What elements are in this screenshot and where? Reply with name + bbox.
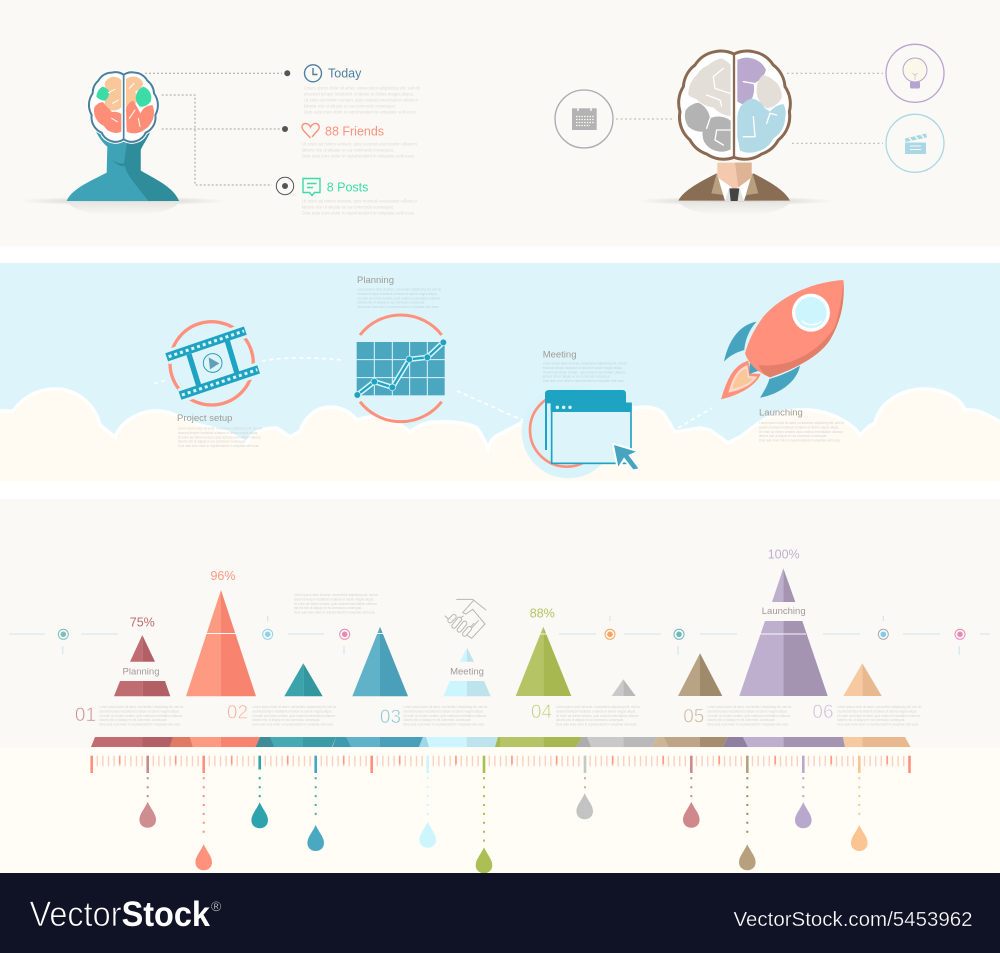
text: step 06 description: Duis aute irure dolor in reprehenderit in voluptate velit esse (837, 723, 918, 727)
connector dots (276, 70, 294, 195)
text: posts description: Duis aute irure dolor in reprehenderit in voluptate velit esse (302, 210, 414, 216)
text: step 06 description: laboris nisi ut aliquip ex ea commodo consequat. (837, 718, 905, 722)
pyramid: grey (612, 679, 636, 696)
step numbers: 03 (380, 707, 401, 728)
pyramid: Planning 75% (114, 635, 170, 696)
pyramid: Launching 100% (739, 568, 828, 696)
text: project setup description: Duis aute irure dolor in reprehenderit in voluptate velit esse (178, 444, 259, 448)
panel: timeline (0, 499, 1000, 873)
text: step 02 description: eiusmod tempor incididunt ut labore et dolore magna aliqua. (252, 709, 332, 713)
text: step 03 description: eiusmod tempor incididunt ut labore et dolore magna aliqua. (403, 709, 483, 713)
text: step 04 description: laboris nisi ut aliquip ex ea commodo consequat. (556, 718, 624, 722)
text: step 02 description: laboris nisi ut aliquip ex ea commodo consequat. (252, 718, 320, 722)
label: Launching: Launching (762, 606, 806, 617)
text: meeting description: Lorem ipsum dolor sit amet, consectetur adipisicing elit, sed do (543, 362, 627, 366)
text: friends description: laboris nisi ut aliquip ex ea commodo consequat. (302, 148, 394, 154)
text: friends description: Duis aute irure dolor in reprehenderit in voluptate velit esse (302, 154, 414, 160)
text: step 05 description: eiusmod tempor incididunt ut labore et dolore magna aliqua. (707, 709, 787, 713)
text: launching description: Ut enim ad minim veniam, quis nostrud exercitation ullamco (759, 430, 843, 434)
label: Launching: Launching (759, 408, 803, 418)
pyramid: tan (678, 653, 722, 696)
text: step 04 description (556, 705, 640, 727)
heading: Today: Today (328, 66, 362, 80)
text: posts description: Ut enim ad minim veniam, quis nostrud exercitation ullamco (302, 198, 417, 204)
text: step 01 description (99, 705, 183, 727)
text: step 04 description: Lorem ipsum dolor sit amet, consectetur adipisicing elit, sed do (556, 705, 640, 709)
text: step 05 description (707, 705, 791, 727)
label: Planning: Planning (123, 666, 159, 678)
icon: clapperboard (886, 114, 944, 172)
icon: growth chart (354, 315, 447, 422)
text: planning description: Lorem ipsum dolor sit amet, consectetur adipisicing elit, sed do (357, 288, 441, 292)
label: Meeting: Meeting (450, 666, 484, 678)
icon: chat bubble (303, 178, 320, 196)
text: today description: laboris nisi ut aliquip ex ea commodo consequat. (304, 104, 396, 110)
icon: clock (304, 65, 322, 82)
left head figure with brain (67, 72, 179, 201)
text: step 01 description: Duis aute irure dolor in reprehenderit in voluptate velit esse (99, 723, 180, 727)
icon: light bulb (886, 44, 944, 102)
text: step 06 description: eiusmod tempor incididunt ut labore et dolore magna aliqua. (837, 709, 917, 713)
text: top description: Lorem ipsum dolor sit amet, consectetur adipisicing elit, sed do (294, 593, 378, 597)
icon: handshake (445, 599, 486, 638)
text: step 04 description: Duis aute irure dolor in reprehenderit in voluptate velit esse (556, 723, 637, 727)
step numbers (75, 702, 834, 728)
text: today description: eiusmod tempor incididunt ut labore et dolore magna aliqua. (304, 92, 414, 98)
text: step 01 description: eiusmod tempor incididunt ut labore et dolore magna aliqua. (99, 709, 179, 713)
text: step 03 description: Ut enim ad minim veniam, quis nostrud exercitation ullamco (403, 714, 486, 718)
text: friends description: Ut enim ad minim veniam, quis nostrud exercitation ullamco (302, 142, 417, 148)
text: top description: Ut enim ad minim veniam, quis nostrud exercitation ullamco (294, 602, 377, 606)
text: posts description (302, 198, 417, 216)
text: today description (304, 86, 420, 116)
step numbers: 04 (531, 702, 552, 723)
ruler (91, 756, 910, 773)
step numbers: 05 (683, 707, 704, 728)
text: friends description (302, 142, 417, 160)
text: step 06 description: Ut enim ad minim veniam, quis nostrud exercitation ullamco (837, 714, 920, 718)
text: launching description: eiusmod tempor incididunt ut labore et dolore magna aliqua. (759, 425, 839, 429)
text: top description: eiusmod tempor incididunt ut labore et dolore magna aliqua. (294, 597, 374, 601)
value: 96%: 96% (210, 569, 236, 583)
image id: VectorStock.com/5453962 (734, 909, 972, 931)
value: 88%: 88% (530, 607, 555, 621)
text: launching description (759, 421, 844, 443)
text: launching description: Duis aute irure dolor in reprehenderit in voluptate velit esse (759, 439, 840, 443)
logo: VectorStock: VectorStock (30, 895, 210, 934)
text: planning description: eiusmod tempor incididunt ut labore et dolore magna aliqua. (357, 292, 437, 296)
timeline nodes (58, 629, 965, 639)
text: project setup description: eiusmod tempor incididunt ut labore et dolore magna aliqua. (178, 431, 258, 435)
value: 75%: 75% (130, 616, 155, 630)
text: meeting description: laboris nisi ut aliquip ex ea commodo consequat. (543, 375, 611, 379)
value: 100%: 100% (768, 548, 800, 562)
text: top description: laboris nisi ut aliquip ex ea commodo consequat. (294, 606, 362, 610)
text: launching description: laboris nisi ut aliquip ex ea commodo consequat. (759, 434, 827, 438)
text: step 06 description (837, 705, 921, 727)
text: step 05 description: Duis aute irure dolor in reprehenderit in voluptate velit esse (707, 723, 788, 727)
text: step 05 description: laboris nisi ut aliquip ex ea commodo consequat. (707, 718, 775, 722)
timeline dashes (9, 616, 990, 655)
text: planning description: laboris nisi ut aliquip ex ea commodo consequat. (357, 301, 425, 305)
text: today description: Duis aute irure dolor in reprehenderit in voluptate velit esse (304, 110, 416, 116)
businessman figure with brain (678, 51, 790, 201)
dashed flight path (154, 358, 712, 428)
panel: sky with clouds (0, 263, 1000, 499)
text: step 01 description: Ut enim ad minim veniam, quis nostrud exercitation ullamco (99, 714, 182, 718)
left head shadow (18, 196, 228, 216)
text: step 02 description: Duis aute irure dolor in reprehenderit in voluptate velit esse (252, 723, 333, 727)
text: launching description: Lorem ipsum dolor sit amet, consectetur adipisicing elit, sed do (759, 421, 844, 425)
icon: film reel (167, 322, 259, 405)
text: step 02 description: Lorem ipsum dolor sit amet, consectetur adipisicing elit, sed do (252, 705, 336, 709)
text: planning description: Duis aute irure dolor in reprehenderit in voluptate velit esse (357, 305, 438, 309)
text: today description: Lorem ipsum dolor sit amet, consectetur adipisicing elit, sed do (304, 86, 420, 92)
text: step 05 description: Ut enim ad minim veniam, quis nostrud exercitation ullamco (707, 714, 790, 718)
text: step 03 description: Duis aute irure dolor in reprehenderit in voluptate velit esse (403, 723, 484, 727)
label: Meeting: Meeting (543, 350, 577, 360)
heading: 88 Friends: 88 Friends (325, 125, 384, 139)
text: project setup description (178, 426, 262, 448)
pyramid: teal small (284, 663, 323, 696)
colour ribbon (91, 737, 910, 747)
text: step 06 description: Lorem ipsum dolor sit amet, consectetur adipisicing elit, sed do (837, 705, 921, 709)
text: step 03 description (403, 705, 487, 727)
text: step 03 description: laboris nisi ut aliquip ex ea commodo consequat. (403, 718, 471, 722)
text: step 04 description: Ut enim ad minim veniam, quis nostrud exercitation ullamco (556, 714, 639, 718)
step numbers: 01 (75, 705, 96, 726)
label: Planning: Planning (357, 275, 394, 286)
text: meeting description: Duis aute irure dolor in reprehenderit in voluptate velit esse (543, 379, 624, 383)
icon: heart (302, 123, 319, 138)
text: posts description: laboris nisi ut aliquip ex ea commodo consequat. (302, 204, 394, 210)
connector lines left (145, 73, 282, 185)
text: step 05 description: Lorem ipsum dolor sit amet, consectetur adipisicing elit, sed do (707, 705, 791, 709)
text: project setup description: Ut enim ad minim veniam, quis nostrud exercitation ullamco (178, 435, 261, 439)
text: project setup description: Lorem ipsum dolor sit amet, consectetur adipisicing elit, sed do (178, 426, 262, 430)
text: project setup description: laboris nisi ut aliquip ex ea commodo consequat. (178, 440, 246, 444)
clouds (0, 389, 1000, 483)
panel: brain profiles (0, 0, 1000, 246)
dotted droplines (148, 777, 859, 845)
step numbers: 06 (812, 702, 834, 723)
icon: rocket (721, 280, 844, 399)
step numbers: 02 (227, 703, 248, 724)
heading: 8 Posts: 8 Posts (327, 181, 368, 195)
pyramid: green 88% (516, 627, 571, 696)
pyramid: Meeting (443, 648, 491, 696)
text: step 03 description: Lorem ipsum dolor sit amet, consectetur adipisicing elit, sed do (403, 705, 487, 709)
footer bar (0, 873, 1000, 953)
pyramid: peach (843, 663, 882, 696)
label: Project setup: Project setup (177, 413, 232, 424)
text: step 01 description: laboris nisi ut aliquip ex ea commodo consequat. (99, 718, 167, 722)
text: step 01 description: Lorem ipsum dolor sit amet, consectetur adipisicing elit, sed do (99, 705, 183, 709)
connector lines right (616, 73, 883, 143)
text: step 04 description: eiusmod tempor incididunt ut labore et dolore magna aliqua. (556, 709, 636, 713)
text: meeting description: eiusmod tempor incididunt ut labore et dolore magna aliqua. (543, 366, 623, 370)
drops (139, 793, 868, 873)
pyramid: blue (352, 627, 408, 696)
pyramid: 96% (186, 590, 256, 696)
text: today description: Ut enim ad minim veniam, quis nostrud exercitation ullamco (304, 98, 418, 104)
text: meeting description (543, 362, 627, 383)
icon: calendar (555, 90, 613, 148)
text: top description (294, 593, 378, 615)
right figure shadow (635, 196, 835, 216)
text: planning description (357, 288, 441, 309)
registered mark: ® (211, 898, 222, 914)
icon: browser windows (522, 385, 638, 478)
text: planning description: Ut enim ad minim veniam, quis nostrud exercitation ullamco (357, 296, 440, 300)
text: step 02 description (252, 705, 336, 727)
text: meeting description: Ut enim ad minim veniam, quis nostrud exercitation ullamco (543, 370, 626, 374)
text: step 02 description: Ut enim ad minim veniam, quis nostrud exercitation ullamco (252, 714, 335, 718)
text: top description: Duis aute irure dolor in reprehenderit in voluptate velit esse (294, 611, 375, 615)
